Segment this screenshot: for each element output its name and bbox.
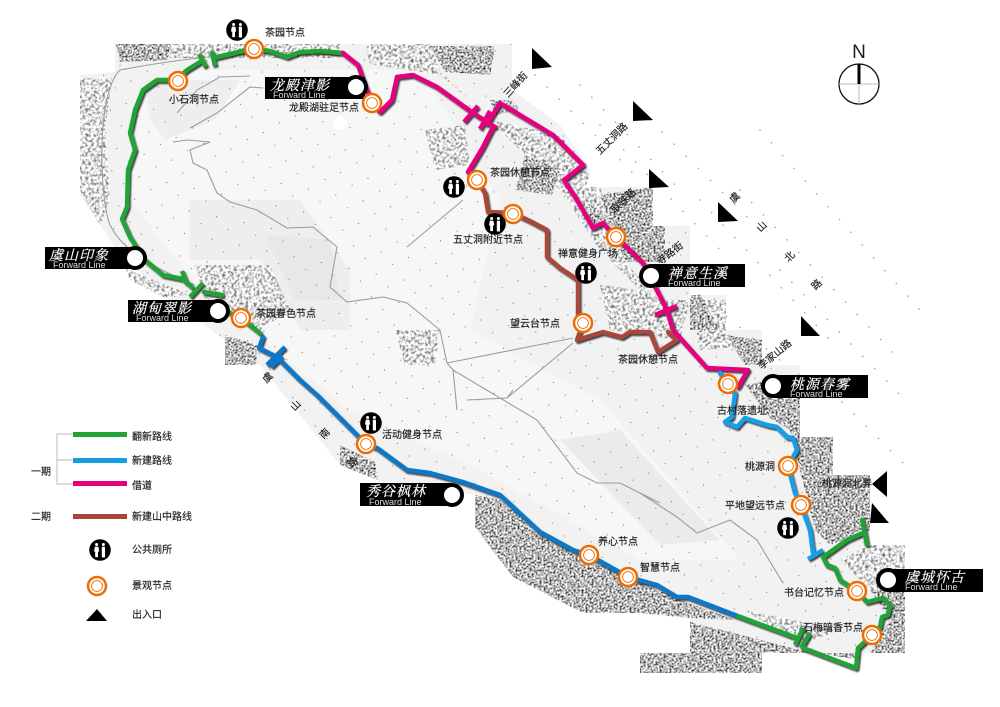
banner: 秀谷枫林: 秀谷枫林 [366, 481, 427, 501]
legend [31, 430, 192, 621]
node labels: 石梅暗香节点 [803, 621, 863, 634]
node labels: 小石洞节点 [169, 94, 219, 106]
route: borrowed magenta [343, 53, 748, 387]
road labels: 虞 [259, 369, 276, 386]
banner: 秀谷枫林 [360, 481, 464, 507]
routes [122, 49, 890, 668]
road labels: 寺路街 [654, 239, 686, 268]
road labels: 山 [288, 398, 304, 414]
north arrow: N [852, 42, 866, 63]
node labels: 茶园休憩节点 [618, 353, 678, 366]
route: renovated green north-west [122, 49, 343, 333]
banner: 虞山印象 [45, 245, 147, 270]
road labels: 联珠路 [608, 185, 639, 216]
node labels: 茶园节点 [265, 26, 305, 39]
banner: 龙殿 [265, 75, 368, 100]
banner: 秀谷枫林: Forward Line [369, 497, 422, 507]
node labels: 书台记忆节点 [784, 586, 844, 599]
legend: 一期 [31, 466, 51, 478]
node labels: 望云台节点 [510, 317, 560, 330]
node labels: 桃源洞 [745, 460, 775, 473]
offsite dots [535, 75, 920, 470]
route: new blue south-west [259, 337, 735, 615]
route segment ticks [182, 51, 867, 648]
banner: 龙殿: Forward Line [273, 90, 326, 100]
road labels: 李家山路 [755, 336, 794, 372]
legend: 公共厕所 [132, 544, 172, 556]
road labels: 路 [808, 276, 825, 293]
banner: 禅意生溪 [639, 263, 745, 288]
node labels: 禅意健身广场 [558, 247, 618, 260]
node labels: 龙殿湖驻足节点 [289, 101, 359, 114]
node labels [169, 26, 872, 634]
legend: 借道 [132, 479, 152, 492]
banner: 桃源春雾: 桃源春雾 [790, 374, 851, 394]
node labels: 茶园休憩节点 [490, 166, 550, 179]
legend: 新建山中路线 [132, 510, 192, 523]
map background [80, 44, 920, 673]
banner: 虞山印象: Forward Line [53, 260, 106, 270]
node labels: 茶园春色节点 [256, 307, 316, 320]
road labels: 北 [782, 249, 798, 265]
node labels: 五丈洞附近节点 [453, 233, 523, 246]
node labels: 养心节点 [598, 535, 638, 548]
route: phase two mountain path [477, 180, 677, 352]
node labels: 智慧节点 [640, 561, 680, 574]
banner: 桃源春雾: Forward Line [790, 389, 843, 399]
road labels: 南 [316, 425, 333, 442]
road labels: 路 [344, 454, 361, 471]
banner: 虞城怀古 [876, 567, 983, 592]
road labels: 五丈洞路 [593, 120, 630, 157]
road labels: 三峰街 [501, 69, 530, 100]
node labels: 古村落遗址 [717, 404, 767, 417]
road labels: 虞 [726, 189, 743, 206]
banner: 虞城怀古: 虞城怀古 [905, 567, 966, 587]
banner: 湖甸翠影 [128, 298, 230, 323]
legend: 二期 [31, 511, 51, 523]
route: new blue east [720, 373, 813, 553]
node labels: 桃源涧北弄 [822, 477, 872, 490]
road labels [259, 69, 825, 471]
road labels: 山 [754, 219, 770, 235]
banner: 湖甸翠影: Forward Line [136, 313, 189, 323]
banner: 禅意生溪: 禅意生溪 [668, 263, 729, 283]
node labels: 活动健身节点 [382, 428, 442, 441]
banner: 桃源春雾 [761, 374, 868, 399]
toilet icons [226, 19, 799, 539]
mountain paths [102, 53, 783, 583]
banner: 湖甸翠影: 湖甸翠影 [132, 298, 193, 318]
node labels: 平地望远节点 [725, 499, 785, 512]
legend: 新建路线 [132, 454, 172, 467]
banner: 虞城怀古: Forward Line [905, 582, 958, 592]
banner: 禅意生溪: Forward Line [668, 278, 721, 288]
north arrow [839, 42, 879, 104]
entrance triangles [532, 48, 889, 523]
landscape nodes [169, 40, 881, 644]
legend: 出入口 [132, 608, 162, 621]
route: renovated green south-east [735, 533, 890, 668]
building clusters [80, 44, 905, 673]
legend: 翻新路线 [132, 430, 172, 443]
legend: 景观节点 [132, 580, 172, 592]
banner: 龙殿: 龙殿津影 [270, 75, 331, 95]
banner: 虞山印象: 虞山印象 [49, 245, 109, 265]
